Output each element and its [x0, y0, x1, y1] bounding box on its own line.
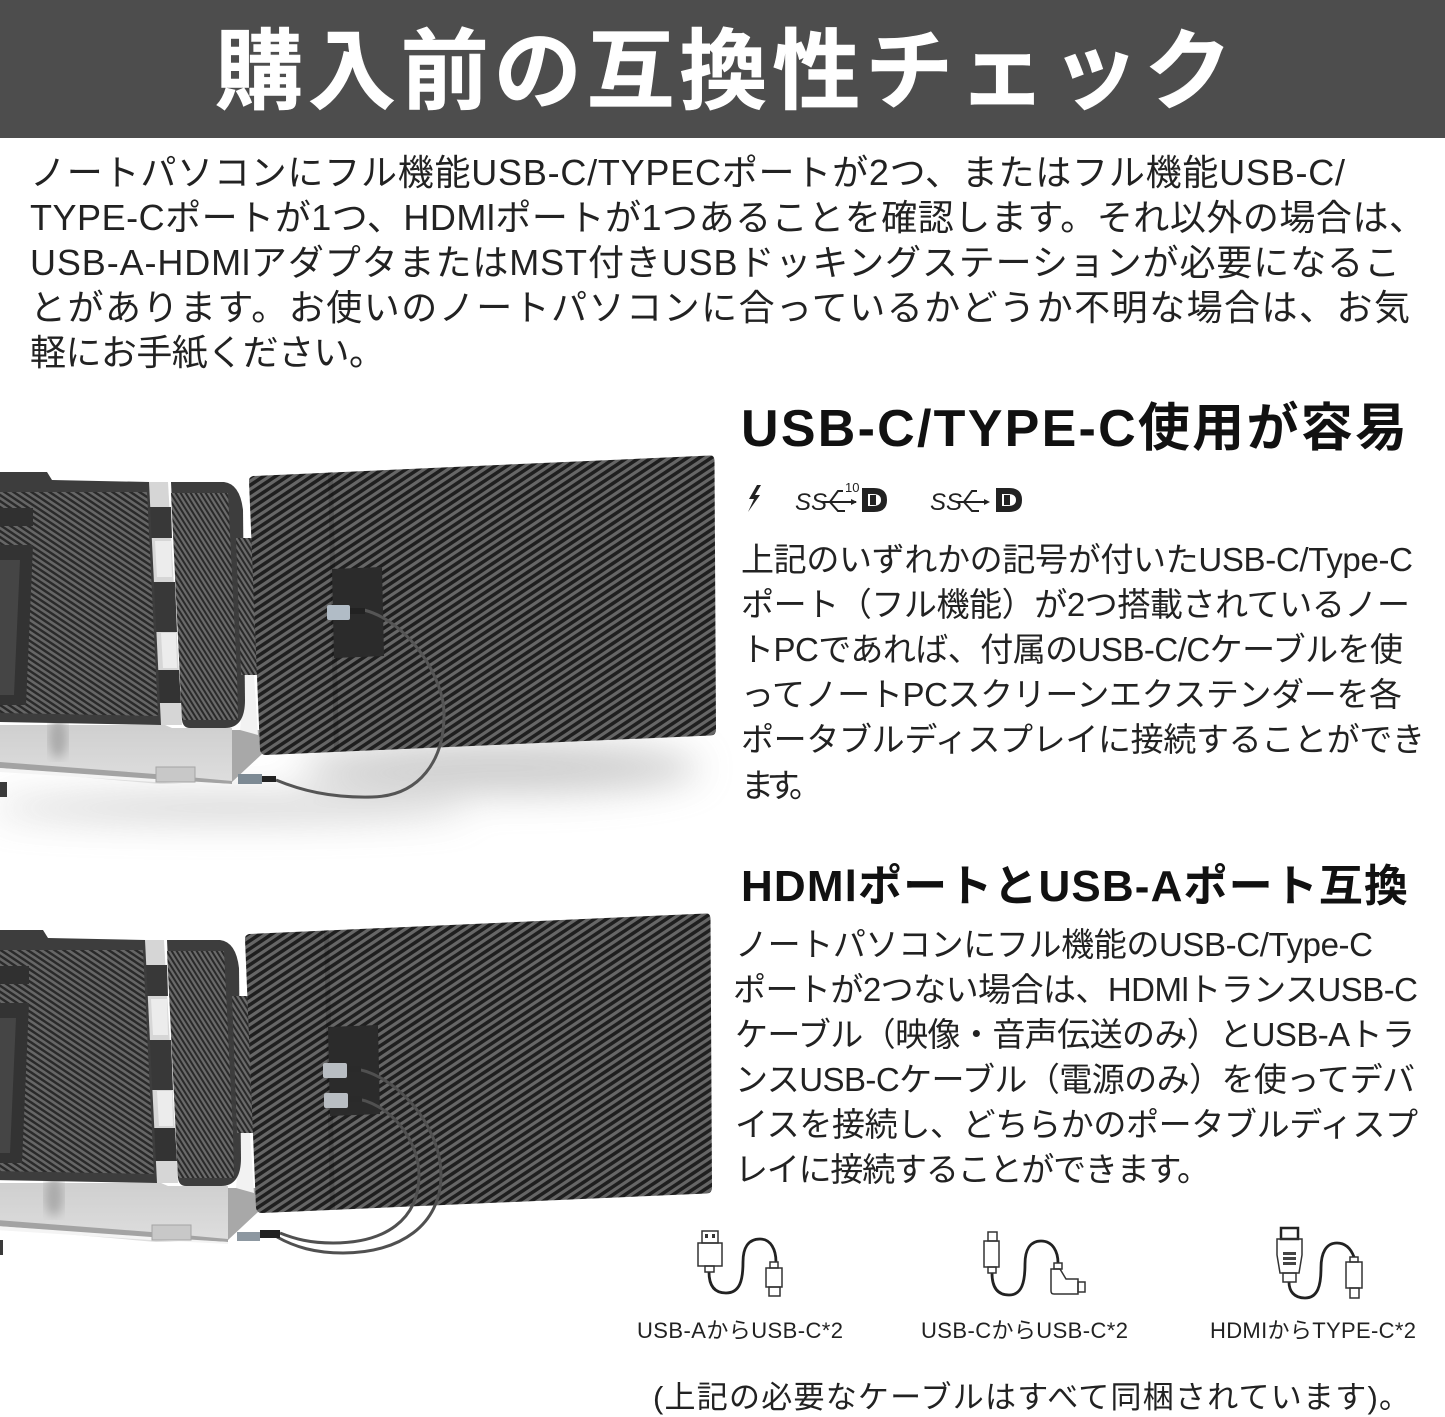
HDMI description text: ンスUSB-Cケーブル（電源のみ）を使ってデバ: [735, 1061, 1415, 1098]
intro text block: TYPE-Cポートが1つ、HDMlポートが1つあることを確認します。それ以外の場合は、: [30, 197, 1425, 238]
photo: laptop extender with USB-C cable: [0, 455, 716, 820]
icon: SS USB DP: [930, 488, 1022, 516]
HDMI description text: イスを接続し、どちらかのポータブルディスプ: [735, 1106, 1418, 1143]
USB-C description text: [741, 541, 1425, 804]
cable item: HDMI to Type-C: [1210, 1228, 1416, 1343]
cable: [276, 610, 444, 797]
intro text block: [30, 152, 1425, 373]
cable: top: [277, 1068, 441, 1253]
usb plug: [327, 605, 350, 620]
USB-C description text: ってノートPCスクリーンエクステンダーを各: [741, 676, 1402, 713]
HDMI description text: ポートが2つない場合は、HDMlトランスUSB-C: [733, 971, 1418, 1008]
cable item: USB-C to USB-C: [921, 1232, 1128, 1343]
HDMI description text: [733, 926, 1418, 1188]
title banner: [0, 0, 1445, 138]
label: USB-AからUSB-C*2: [637, 1318, 843, 1343]
icon: USB-A cable: [698, 1231, 782, 1296]
icon: HDMI cable: [1277, 1228, 1362, 1298]
HDMI description text: ケーブル（映像・音声伝送のみ）とUSB-Aトラ: [735, 1016, 1415, 1053]
footnote: (上記の必要なケーブルはすべて同梱されています)。: [653, 1380, 1410, 1415]
label: USB-CからUSB-C*2: [921, 1318, 1128, 1343]
intro text block: 軽にお手紙ください。: [30, 332, 385, 373]
title: 購入前の互換性チェック: [215, 22, 1232, 121]
usb plugs: [323, 1063, 347, 1078]
cable: bottom: [280, 1098, 419, 1243]
USB-C description text: ポート（フル機能）が2つ搭載されているノー: [741, 586, 1410, 623]
intro text block: とがあります。お使いのノートパソコンに合っているかどうか不明な場合は、お気: [30, 287, 1410, 328]
cable item: USB-A to USB-C: [637, 1231, 843, 1343]
heading: USB-C: USB-C/TYPE-C使用が容易: [741, 400, 1407, 458]
icon: thunderbolt: [748, 485, 761, 512]
icon: SS USB 10 DP: [795, 480, 887, 516]
heading: HDMI: HDMlポートとUSB-Aポート互換: [741, 862, 1408, 911]
HDMI description text: ノートパソコンにフル機能のUSB-C/Type-C: [735, 926, 1373, 963]
intro text block: ノートパソコンにフル機能USB-C/TYPECポートが2つ、またはフル機能USB-C/: [30, 152, 1345, 193]
icon: SS USB 10 DP: SS: [795, 489, 827, 516]
shadow: [0, 742, 700, 820]
USB-C description text: ポータブルディスプレイに接続することができ: [741, 721, 1425, 758]
USB-C description text: ます。: [741, 767, 822, 804]
label: HDMIからTYPE-C*2: [1210, 1318, 1416, 1343]
intro text block: USB-A-HDMlアダプタまたはMST付きUSBドッキングステーションが必要になるこ: [30, 242, 1400, 283]
USB-C description text: トPCであれば、付属のUSB-C/Cケーブルを使: [741, 631, 1403, 668]
icon: SS USB DP: SS: [930, 489, 962, 516]
photo: laptop extender with HDMI and USB-A cables: [0, 913, 712, 1255]
icon row: supported port symbols: [748, 480, 1022, 516]
HDMI description text: レイに接続することができます。: [735, 1151, 1210, 1188]
icon: SS USB 10 DP: 10: [845, 480, 859, 495]
laptop port connector: [238, 774, 262, 784]
USB-C description text: 上記のいずれかの記号が付いたUSB-C/Type-C: [741, 541, 1413, 578]
icon: USB-C cable: [984, 1232, 1085, 1295]
laptop port connectors: [237, 1232, 260, 1241]
